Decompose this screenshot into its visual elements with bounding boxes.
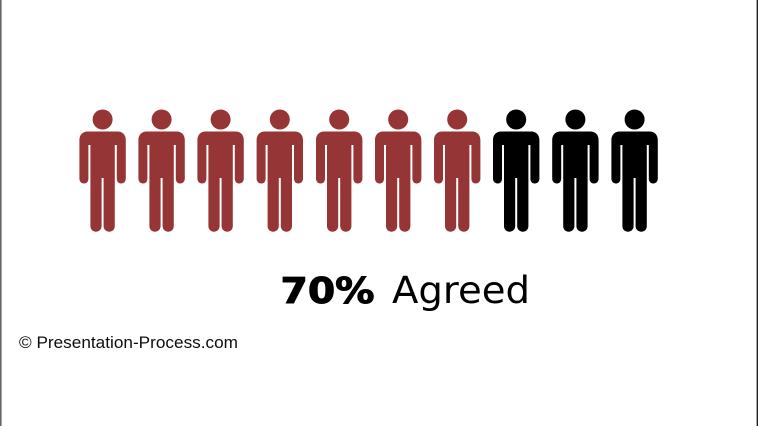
- person 7: [434, 110, 480, 232]
- person 9: [552, 110, 599, 232]
- pictogram row: 10 people: [79, 110, 658, 232]
- person 6: [375, 110, 421, 232]
- label: Agreed: [392, 269, 530, 312]
- person 2: [138, 110, 185, 232]
- person 3: [197, 110, 244, 232]
- person 8: [493, 110, 539, 232]
- copyright credit: © Presentation-Process.com: [19, 333, 238, 352]
- remaining group: 3 black people: [493, 110, 658, 232]
- agreed group: 7 red people: [79, 110, 480, 232]
- person 4: [257, 110, 303, 232]
- percentage: 70%: [280, 271, 374, 312]
- person 1: [79, 110, 126, 232]
- person 5: [316, 110, 362, 232]
- person 10: [611, 110, 658, 232]
- headline: 70% Agreed: [280, 269, 530, 312]
